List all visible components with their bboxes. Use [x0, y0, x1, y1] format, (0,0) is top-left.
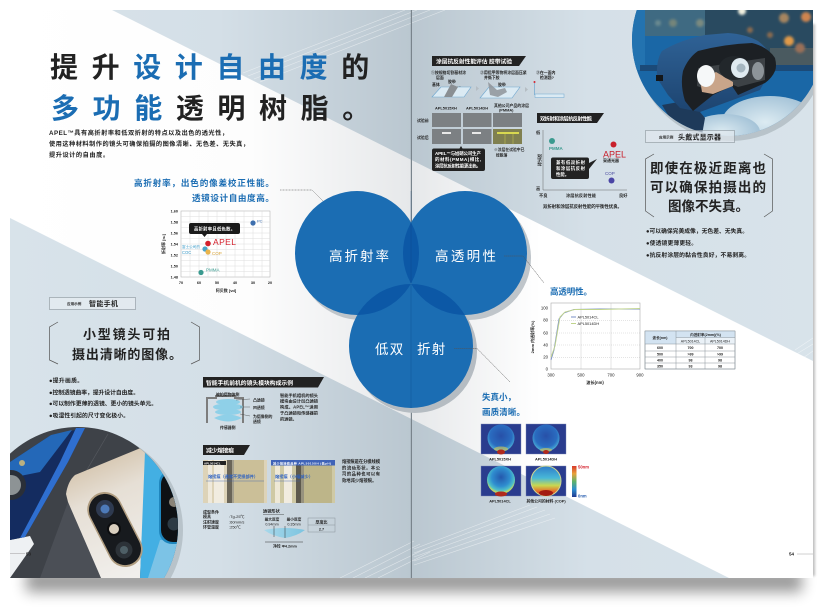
table: transmittance values: 98	[688, 358, 692, 362]
head mounted display bullet list	[646, 227, 750, 259]
bracket heading: smartphone: 摄出清晰的图像。	[72, 347, 182, 362]
circle label: high transparency: 高透明性	[435, 248, 496, 264]
chart: refractive index vs Abbe number: 高折射率且低色散。	[194, 226, 235, 232]
table: transmittance values: 93	[688, 364, 692, 368]
chart: refractive index vs Abbe number: 1.58	[171, 220, 178, 224]
diagram: lens module: 被拍摄物体侧	[216, 392, 239, 397]
chart: refractive index vs Abbe number: 40	[233, 281, 237, 285]
diagram: lens module: 透镜	[253, 419, 261, 424]
text: lens module description	[280, 392, 319, 422]
chart: refractive index vs Abbe number: 30	[251, 281, 255, 285]
heat maps: birefringence: APL5014CL	[489, 498, 511, 504]
heading: high refractive index: 透镜设计自由度高。	[192, 192, 274, 203]
text: weld line description: 的流动形状。本公	[342, 464, 381, 472]
diagram: tape test steps: ③在一面内	[536, 70, 556, 75]
page number left	[10, 552, 32, 556]
circle label: high refractive index: 高折射率	[329, 248, 389, 264]
heat maps: birefringence: APL5014DH	[535, 456, 557, 462]
head mounted display bullet list: ●使透镜更薄更轻。	[646, 239, 697, 247]
chart: refractive index vs Abbe number: PC	[257, 218, 263, 224]
chart: transmittance curve: 700	[607, 372, 615, 378]
section bar: weld lines	[203, 445, 250, 455]
tag: head mounted display: 头戴式显示器	[678, 132, 721, 142]
bracket heading: smartphone: 小型镜头可拍	[83, 327, 170, 342]
diagram: lens module	[207, 392, 273, 430]
chart: birefringence vs coating: 双折射	[536, 154, 543, 167]
note: coating peeled	[494, 147, 525, 158]
chart: transmittance curve: 80	[543, 318, 549, 322]
chart: birefringence vs coating: 和涂层抗反射	[556, 165, 586, 172]
chart: transmittance curve: 500	[577, 372, 585, 378]
diagram: tape test steps: 基体	[432, 82, 440, 87]
circle label: low birefringence: 折射	[417, 342, 446, 357]
diagram: tape test steps: ②用指甲等物将涂层面压紧	[480, 70, 527, 75]
text: molding conditions	[203, 508, 245, 530]
title	[50, 52, 384, 124]
diagram: lens shape: 2.7	[319, 528, 324, 532]
section bar: lens module: 智能手机前机的镜头模块构成示例	[206, 379, 293, 387]
diagram: lens shape: 最小厚度	[287, 516, 302, 522]
chart: refractive index vs Abbe number: COC	[182, 250, 191, 255]
chart: transmittance curve: 60	[543, 330, 549, 336]
heat maps: birefringence: 0nm	[578, 494, 587, 498]
text: molding conditions: 注射速度	[203, 518, 219, 524]
photo: weld line comparison: APL5014CL	[204, 461, 221, 465]
chart: birefringence vs coating: COP	[605, 171, 615, 176]
text: weld line description: 司的品种也可以有	[342, 470, 381, 478]
chart: refractive index vs Abbe number: PMMA	[206, 268, 220, 272]
chart: refractive index vs Abbe number: 富士公司的	[182, 244, 200, 249]
diagram: lens shape: 0.35mm	[287, 522, 301, 526]
text: molding conditions: 成型条件	[203, 508, 219, 514]
text: lens module description: 智能手机相机的镜头	[280, 392, 319, 399]
chart: transmittance curve: APL5014DH	[578, 321, 599, 326]
smartphone bullet list: ●控制透镜曲率，提升设计自由度。	[49, 388, 139, 396]
diagram: lens shape: 透镜形状	[263, 508, 281, 514]
smartphone bullet list	[49, 376, 157, 419]
chart: refractive index vs Abbe number: 1.54	[171, 242, 179, 246]
head mounted display bullet list: ●可以确保完美成像，无色差、无失真。	[646, 227, 748, 235]
page number right: 54	[789, 552, 795, 556]
chart: refractive index vs Abbe number: 阿贝数 [νd]	[216, 287, 237, 293]
heading: low distortion	[482, 392, 525, 417]
chart: transmittance curve: 100	[541, 306, 549, 310]
table: transmittance values: 600	[657, 346, 663, 350]
intro paragraph: 使用这种材料制作的镜头可确保拍摄的图像清晰、无色差、无失真，	[49, 140, 249, 148]
circle label: low birefringence: 低双	[375, 342, 404, 357]
diagram: tape test steps: 胶带	[448, 79, 456, 84]
table: transmittance values: 350	[657, 364, 663, 368]
chart: birefringence vs coating	[536, 129, 628, 210]
text: weld line description: 熔接痕是在分模线模	[342, 458, 381, 465]
leader line: high transparency	[504, 256, 544, 283]
table: transmittance values	[645, 331, 735, 369]
chart: refractive index vs Abbe number: 1.48	[171, 276, 178, 280]
chart: birefringence vs coating: APEL	[603, 150, 626, 160]
photo: weld line comparison: 熔接痕（小幅减少）	[275, 473, 313, 480]
chart: birefringence vs coating: PMMA	[549, 146, 563, 151]
table: transmittance values: 98	[718, 364, 722, 368]
chart: refractive index vs Abbe number: 1.56	[171, 232, 178, 236]
chart: refractive index vs Abbe number: APEL	[213, 237, 236, 247]
diagram: lens shape	[263, 508, 335, 548]
heading: high refractive index	[134, 177, 274, 203]
chart: refractive index vs Abbe number: 50	[215, 281, 219, 285]
title: 提升设计自由度的	[50, 52, 383, 83]
diagram: tape test steps: 层面	[436, 75, 444, 80]
diagram: tape test steps: 胶带	[498, 82, 506, 87]
heat maps: birefringence: APL5015XH	[489, 456, 511, 462]
chart: birefringence vs coating: 高	[536, 185, 540, 192]
samples: before and after test: 其他公司产品的涂层	[494, 103, 529, 108]
chart: transmittance curve: 40	[543, 342, 549, 348]
photo: smartphones	[10, 427, 183, 578]
heading: low distortion: 画质清晰。	[482, 407, 525, 417]
photo: weld line comparison: 减少熔接痕品种 APL5015XH (低pH)	[273, 460, 331, 465]
chart: transmittance curve: 2mm 内透射率(%)	[529, 320, 535, 353]
samples: before and after test: 试验前	[417, 118, 429, 123]
bracket heading: head mounted display: 可以确保拍摄出的	[650, 179, 766, 195]
text: molding conditions: :Tg-25℃	[229, 514, 245, 519]
table: transmittance values: 700	[688, 346, 694, 350]
diagram: tape test steps: 切口	[457, 86, 465, 91]
text: lens module description: 于凸透镜和传感器前	[280, 410, 318, 416]
text: lens module description: 构成。APEL™适用	[280, 404, 318, 410]
samples: before and after test: APL5015XH	[435, 106, 457, 110]
heat maps: birefringence: 50nm	[578, 464, 589, 470]
chart: transmittance curve	[529, 303, 644, 386]
chart: refractive index vs Abbe number: 折射率 [n₂]	[160, 233, 166, 254]
diagram: lens shape: 厚度比	[316, 518, 328, 524]
diagram: tape test steps	[431, 70, 564, 98]
samples: before and after test: APL5014DH	[466, 106, 488, 110]
text: molding conditions: :60mm/s	[229, 520, 244, 524]
chart: birefringence vs coating: 不良	[539, 192, 548, 199]
diagram: lens module: 凸透镜	[253, 398, 265, 402]
chart: refractive index vs Abbe number	[160, 210, 272, 293]
text: molding conditions: 环管温度	[203, 524, 219, 530]
chart: refractive index vs Abbe number: COP	[212, 251, 222, 256]
chart: transmittance curve: 波长(nm)	[586, 379, 604, 386]
heading: high refractive index: 高折射率，出色的像差校正性能。	[134, 177, 274, 188]
callout: coating result: 涂层抗反射性能更出色。	[435, 162, 481, 170]
table: transmittance values: >99	[717, 352, 723, 356]
intro paragraph: APEL™具有高折射率和低双折射的特点以及出色的透光性，	[49, 129, 228, 137]
tag: smartphone application: 智能手机	[89, 299, 118, 308]
chart: birefringence vs coating: 良好	[619, 192, 628, 199]
chart: transmittance curve: 900	[636, 372, 644, 378]
section bar: birefringence chart	[537, 113, 604, 123]
bracket heading: smartphone	[50, 322, 200, 364]
chart: birefringence vs coating: 双折射和涂层抗反射性能的平衡性优良。	[543, 203, 622, 210]
section bar: lens module	[203, 377, 324, 388]
text: molding conditions: :250℃	[229, 524, 241, 530]
diagram: lens shape: 净径 Φ4.2mm	[273, 544, 298, 548]
photo: weld line comparison	[203, 460, 335, 503]
bracket heading: head mounted display	[646, 154, 772, 217]
chart: transmittance curve: 300	[547, 372, 555, 378]
text: lens module description: 的透镜。	[280, 416, 297, 422]
callout: coating result: 的材料(PMMA)相比,	[435, 156, 481, 163]
section bar: coating test: 涂层抗反射性能评估 胶带试验	[436, 58, 512, 66]
venn diagram	[295, 191, 531, 413]
chart: birefringence vs coating: 低	[536, 129, 541, 136]
chart: birefringence vs coating: 涂层抗反射性能	[566, 192, 597, 199]
smartphone bullet list: ●可以制作更薄的透镜、更小的镜头单元。	[49, 399, 157, 407]
chart: refractive index vs Abbe number: 1.50	[171, 264, 178, 268]
diagram: tape test steps: 检测题?	[540, 75, 555, 80]
samples: before and after test: (PMMA)	[499, 108, 514, 112]
chart: refractive index vs Abbe number: 70	[179, 281, 183, 285]
title: 多功能透明树脂。	[51, 93, 384, 124]
callout: coating result: APEL™与旭硝公司生产	[435, 150, 482, 157]
tag: head mounted display: 应用示例	[659, 134, 674, 140]
diagram: lens module: 为摄像侧的	[253, 414, 273, 419]
bracket heading: head mounted display: 即使在极近距离也	[650, 160, 766, 176]
chart: birefringence vs coating: 采通光器	[603, 157, 619, 163]
page number right	[789, 552, 813, 556]
table: transmittance values: 波长(nm)	[653, 335, 668, 340]
intro paragraph: 提升设计的自由度。	[49, 151, 109, 159]
note: coating peeled: 经脱落	[496, 152, 508, 158]
samples: before and after test	[417, 103, 529, 144]
chart: refractive index vs Abbe number: 1.60	[171, 210, 178, 214]
chart: transmittance curve: 20	[543, 354, 549, 360]
tag: smartphone application: 应用示例	[67, 301, 82, 306]
samples: before and after test: 试验后	[417, 135, 429, 140]
heading: low distortion: 失真小，	[482, 392, 516, 402]
heat maps: birefringence: 其他公司的材料 (COP)	[526, 498, 566, 504]
section bar: coating test	[432, 56, 526, 66]
heat maps: birefringence	[481, 424, 589, 504]
text: weld line description: 效地减少熔接痕。	[342, 477, 376, 484]
section bar: weld lines: 减少熔接痕	[206, 446, 234, 454]
page number left: 53	[26, 552, 32, 556]
intro paragraph	[49, 129, 249, 159]
leader line: low birefringence	[454, 348, 510, 382]
table: transmittance values: APL5014DH	[710, 340, 730, 344]
table: transmittance values: >99	[687, 352, 694, 356]
head mounted display bullet list: ●抗反射涂层的黏合性良好，不易剥离。	[646, 251, 750, 259]
bracket heading: head mounted display: 图像不失真。	[668, 198, 749, 214]
chart: refractive index vs Abbe number: 1.52	[171, 254, 178, 258]
diagram: lens shape: 最大厚度	[265, 516, 280, 522]
leader line: high refractive index	[280, 190, 358, 237]
table: transmittance values: APL5014CL	[681, 340, 700, 344]
tag: smartphone application	[50, 298, 136, 310]
table: transmittance values: 700	[717, 346, 723, 350]
chart: refractive index vs Abbe number: 20	[268, 281, 272, 285]
table: transmittance values: 400	[657, 358, 663, 362]
photo: VR headset	[632, 10, 813, 141]
callout: coating result	[432, 146, 485, 171]
diagram: lens shape: 0.94mm	[265, 522, 279, 526]
chart: refractive index vs Abbe number: 60	[197, 281, 201, 285]
table: transmittance values: 98	[718, 358, 722, 362]
chart: birefringence vs coating: 兼有低双折射	[556, 159, 586, 166]
text: lens module description: 模块由设计凹凸透镜	[280, 398, 319, 405]
smartphone bullet list: ●吸湿性引起的尺寸变化极小。	[49, 411, 129, 419]
smartphone bullet list: ●提升画质。	[49, 376, 83, 384]
table: transmittance values: 500	[657, 352, 663, 356]
tag: head mounted display	[646, 130, 734, 142]
chart: transmittance curve: 0	[546, 366, 549, 372]
text: weld line description	[342, 458, 381, 484]
chart: transmittance curve: APL5014CL	[578, 314, 599, 320]
chart: birefringence vs coating: 性能。	[556, 171, 569, 177]
diagram: lens module: 凹透镜	[253, 405, 265, 410]
table: transmittance values: 内透射率(2mm)(%)	[690, 332, 722, 337]
diagram: tape test steps: 并撕下胶	[484, 75, 500, 80]
photo: weld line comparison: 熔接痕（通常不受损部件）	[208, 473, 258, 480]
note: coating peeled: ※涂层在试验中已	[494, 147, 525, 152]
heading: high transparency: 高透明性。	[550, 286, 592, 296]
diagram: lens module: 传感器侧	[220, 425, 236, 430]
section bar: birefringence chart: 双折射和涂层抗反射性能	[540, 114, 593, 122]
diagram: tape test steps: ①按规格切割基材涂	[431, 70, 466, 75]
text: molding conditions: 模具	[203, 513, 211, 519]
